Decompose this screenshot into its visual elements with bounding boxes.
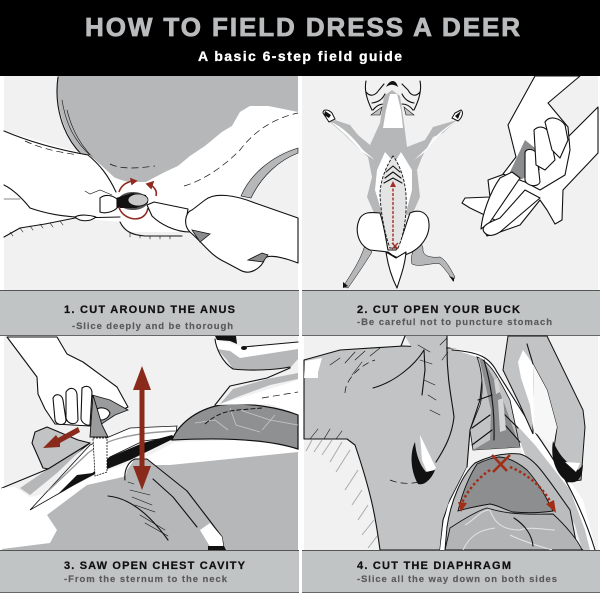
deer: muzzle and throat	[383, 81, 403, 128]
heading: 4. CUT THE DIAPHRAGM	[357, 560, 511, 572]
caption panel: step 2	[302, 290, 600, 336]
hand on saw	[7, 337, 128, 426]
hind leg, top right	[215, 368, 298, 414]
note: -Slice deeply and be thorough	[72, 321, 233, 332]
caption panel: step 3	[0, 550, 299, 593]
deer rump, thigh and leg fill	[4, 106, 298, 237]
finger grips	[192, 230, 268, 262]
panel: step 4 illustration	[304, 336, 598, 550]
deer: hind legs	[343, 240, 455, 288]
thumb creases	[85, 190, 112, 212]
deer: open belly	[380, 156, 406, 248]
stomach	[445, 508, 582, 550]
rib band stripes	[48, 431, 175, 491]
foreleg one	[373, 336, 454, 484]
white body sliver	[440, 467, 470, 550]
deer: rump and thighs	[357, 211, 429, 258]
far forelegs	[503, 336, 585, 482]
gray wedge under body line	[20, 448, 83, 495]
red dotted arc arrows	[458, 455, 556, 513]
deer: ears	[371, 107, 414, 115]
head and neck, top right	[215, 336, 298, 370]
note: -Be careful not to puncture stomach	[357, 317, 552, 328]
note: -From the sternum to the neck	[64, 574, 228, 585]
red rotation arrows	[119, 179, 156, 219]
fur and leg outlines	[4, 113, 298, 239]
deer: antlers	[365, 81, 421, 110]
panel: step 3 illustration	[2, 336, 298, 550]
fingers	[483, 118, 568, 235]
deer: hind hooves	[343, 276, 454, 288]
belly contour lines	[57, 77, 155, 168]
diaphragm dome	[458, 457, 553, 513]
deer: tail	[386, 252, 406, 288]
hatching under body	[306, 440, 378, 548]
knife handle	[147, 202, 190, 232]
liver organ	[172, 404, 298, 449]
white fur corner	[304, 358, 322, 378]
red cut line	[390, 181, 398, 249]
rear leg strip	[241, 148, 298, 198]
caption panel: step 1	[0, 290, 299, 336]
deer: ribs in incision	[384, 166, 402, 183]
foreleg	[108, 459, 226, 550]
knife handle and blade	[481, 140, 540, 229]
knife blade and cut	[100, 192, 148, 213]
rib band	[30, 426, 177, 510]
knife-holding fist	[503, 76, 580, 190]
red side arrow	[43, 427, 80, 448]
subtitle: A basic 6-step field guide	[198, 48, 402, 64]
deer: foreleg hooves	[323, 110, 462, 122]
caption panel: step 4	[302, 550, 600, 593]
deer body	[304, 346, 484, 550]
open hand and forearm	[462, 107, 598, 236]
panel: step 2 illustration	[302, 76, 598, 290]
panel: step 1 illustration	[4, 76, 298, 290]
body contour lines	[310, 348, 420, 483]
saw	[90, 395, 108, 476]
outer chest strip	[449, 348, 596, 550]
deer: white foreleg markings	[331, 121, 456, 160]
heading: 1. CUT AROUND THE ANUS	[64, 304, 235, 316]
left fingers	[75, 215, 96, 221]
red vertical double arrow	[133, 366, 151, 490]
body cavity	[57, 435, 175, 495]
body line	[2, 443, 90, 488]
white fur area on the left	[2, 438, 298, 549]
deer: white chest bands	[375, 152, 412, 213]
note: -Slice all the way down on both sides	[357, 574, 557, 585]
abdomen	[57, 76, 298, 182]
deer: torso and forelegs	[330, 90, 457, 215]
right hand	[186, 195, 298, 272]
header band	[0, 0, 600, 76]
heading: 3. SAW OPEN CHEST CAVITY	[64, 560, 246, 572]
heading: 2. CUT OPEN YOUR BUCK	[357, 304, 520, 316]
title: HOW TO FIELD DRESS A DEER	[85, 12, 520, 42]
far leg	[32, 427, 90, 470]
dark chest and ribs	[470, 357, 520, 450]
fingers	[53, 386, 128, 425]
deer underside	[2, 452, 298, 550]
diaphragm outer wall	[445, 454, 583, 550]
